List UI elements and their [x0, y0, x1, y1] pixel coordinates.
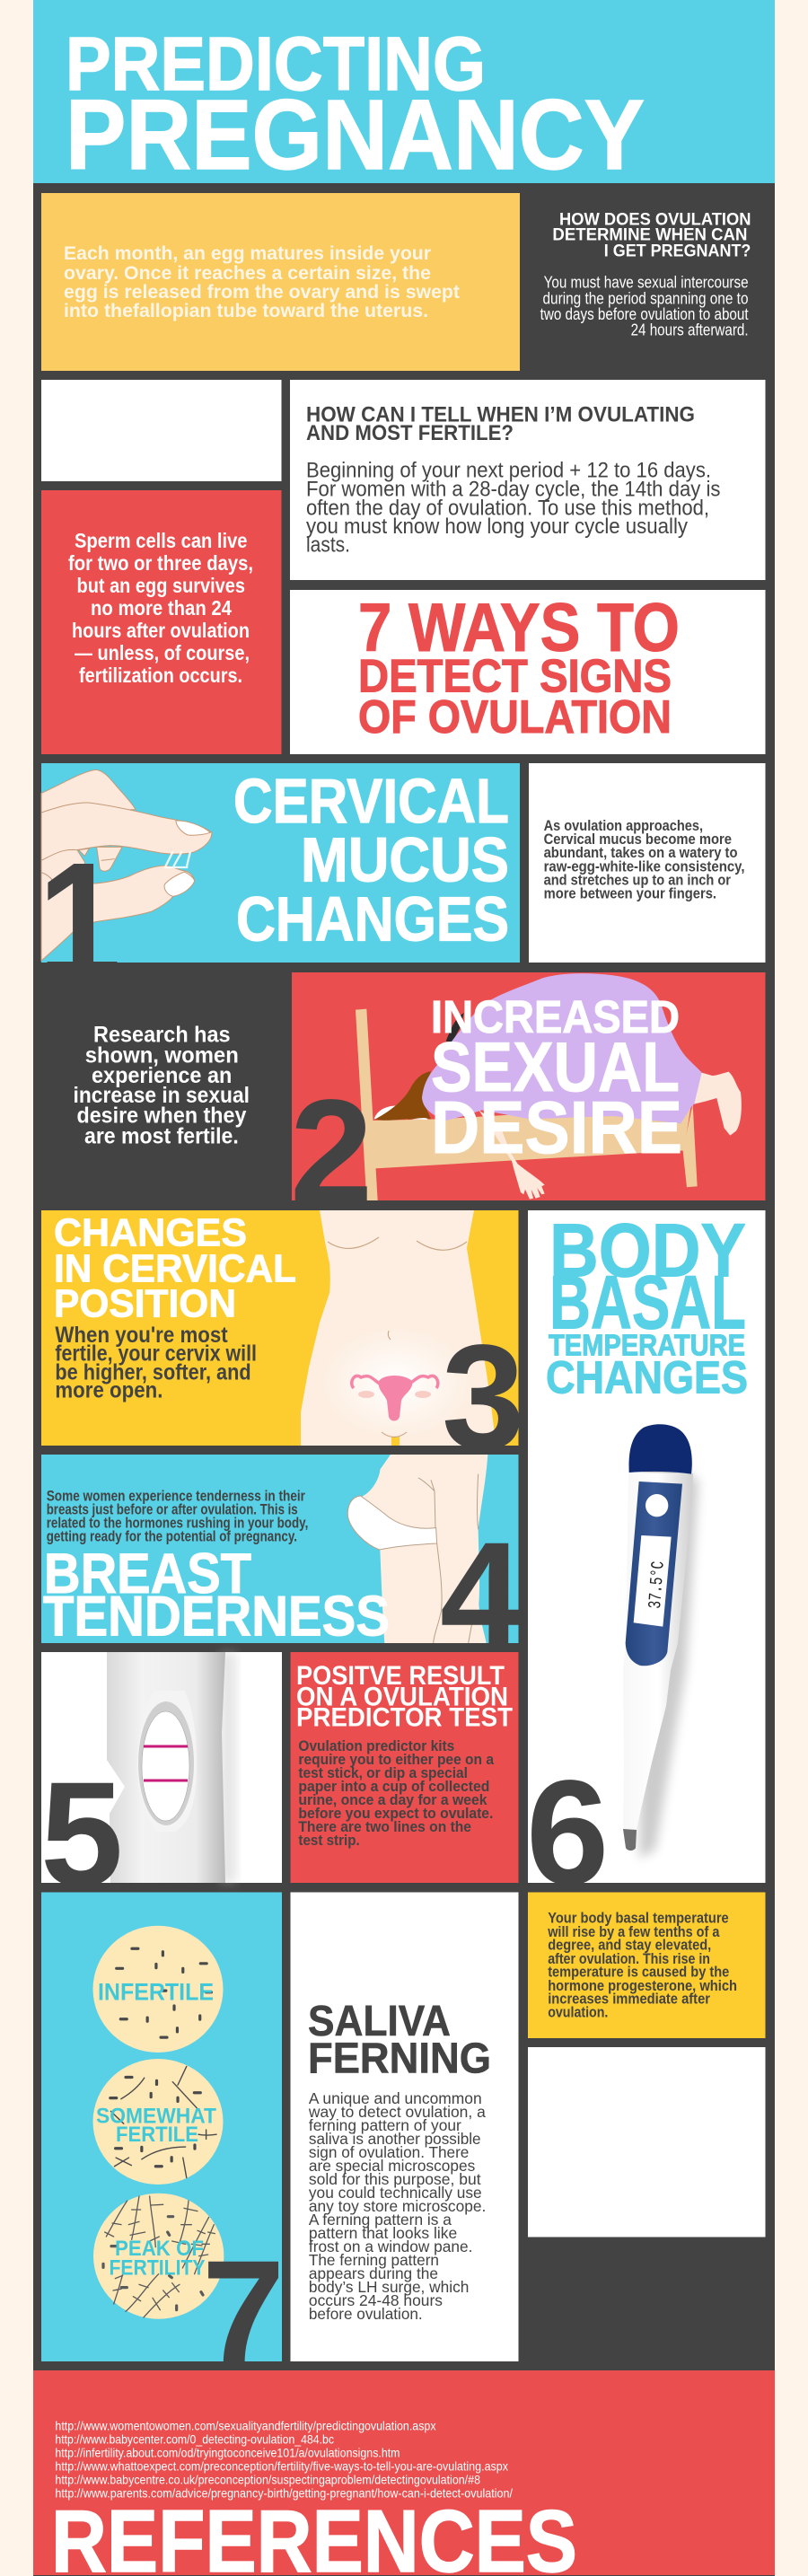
- panel: 3 cervical position: [41, 1210, 524, 1481]
- circle: peak of fertility: [93, 2194, 224, 2319]
- survival text: — unless, of course,: [75, 641, 250, 664]
- positive result text: require you to either pee on a: [298, 1751, 494, 1768]
- basal temperature body text: will rise by a few tenths of a: [547, 1923, 720, 1940]
- survival text: fertilization occurs.: [79, 664, 242, 687]
- heading: increased sexual desire: SEXUAL: [431, 1027, 680, 1106]
- positive result text: Ovulation predictor kits: [298, 1737, 454, 1754]
- panel: cervical mucus text: [529, 763, 765, 963]
- body text: [306, 459, 720, 558]
- illustration: torso with uterus: [301, 1210, 496, 1446]
- icon: test stick: [107, 1652, 236, 1883]
- saliva ferning text: saliva is another possible: [309, 2130, 481, 2148]
- egg intro text: [64, 243, 460, 321]
- positive result text: before you expect to ovulate.: [298, 1805, 493, 1822]
- circle: somewhat fertile: SOMEWHAT: [96, 2105, 216, 2128]
- positive result text: [298, 1737, 494, 1849]
- text block: research: [74, 1023, 250, 1148]
- illustration: torso with bra: [347, 1455, 487, 1643]
- heading: 7 ways to detect signs of ovulation: OF OVULATION: [358, 691, 672, 743]
- basal temperature body text: hormone progesterone, which: [548, 1977, 737, 1994]
- positive result text: There are two lines on the: [298, 1818, 471, 1835]
- panel: 2 increased sexual desire: [290, 972, 765, 1235]
- heading: increased sexual desire: [431, 991, 682, 1169]
- icon: uterus: [352, 1376, 438, 1420]
- panel: basal temperature text: [528, 1893, 765, 2038]
- panel: header: [33, 0, 775, 190]
- saliva ferning text: [308, 2089, 486, 2323]
- cervical position text: fertile, your cervix will: [55, 1341, 257, 1367]
- panel: egg intro: [41, 193, 520, 371]
- panel: positive result: [291, 1652, 519, 1883]
- cervical mucus body text: As ovulation approaches,: [544, 818, 703, 834]
- number 7: 7: [202, 2230, 285, 2396]
- heading: increased sexual desire: INCREASED: [431, 991, 680, 1042]
- panel: 5 ovulation test stick: [40, 1652, 282, 1918]
- saliva ferning text: you could technically use: [309, 2184, 482, 2202]
- number 6: 6: [526, 1750, 609, 1916]
- circle: peak of fertility: PEAK OF: [115, 2237, 204, 2261]
- body text: Beginning of your next period + 12 to 16 days.: [306, 459, 711, 483]
- icon: thermometer: [623, 1424, 698, 1859]
- text block: how does ovulation determine: You must have sexual intercourse: [544, 274, 749, 292]
- panel: sperm and egg survival: [41, 490, 282, 754]
- number 3: 3: [442, 1314, 524, 1481]
- text block: research: increase in sexual: [74, 1083, 250, 1108]
- text block: research: desire when they: [77, 1103, 246, 1129]
- saliva ferning text: sold for this purpose, but: [309, 2170, 481, 2188]
- cervical mucus body text: more between your fingers.: [544, 885, 716, 901]
- survival text: no more than 24: [91, 596, 232, 620]
- positive result text: test strip.: [298, 1832, 360, 1849]
- breast tenderness text: related to the hormones rushing in your body,: [47, 1516, 308, 1532]
- number 5: 5: [40, 1752, 123, 1918]
- panel: 6 body basal temperature: [526, 1209, 765, 1916]
- breast tenderness text: getting ready for the potential of pregnancy.: [47, 1529, 297, 1545]
- heading: saliva ferning: SALIVA: [308, 1998, 451, 2045]
- text block: how does ovulation determine: during the period spanning one to: [542, 289, 749, 307]
- heading: 7 ways to detect signs of ovulation: 7 WAYS TO: [358, 590, 680, 666]
- egg intro text: ovary. Once it reaches a certain size, the: [64, 263, 431, 284]
- breast tenderness text: [47, 1489, 308, 1545]
- saliva ferning text: frost on a window pane.: [309, 2238, 472, 2255]
- title: PREGNANCY: [66, 80, 645, 190]
- saliva ferning text: are special microscopes: [309, 2157, 476, 2175]
- illustration: couple on a bed: [356, 973, 742, 1200]
- body text: you must know how long your cycle usually: [306, 514, 688, 539]
- cervical mucus body text: [544, 818, 745, 901]
- egg intro text: Each month, an egg matures inside your: [64, 243, 431, 264]
- heading: increased sexual desire: DESIRE: [431, 1086, 682, 1169]
- text block: how does ovulation determine: [540, 210, 751, 338]
- text block: research: shown, women: [85, 1042, 239, 1068]
- cervical mucus body text: raw-egg-white-like consistency,: [544, 858, 745, 875]
- icon: mucus strands: [164, 851, 190, 868]
- circle: somewhat fertile: [93, 2059, 223, 2185]
- survival text: for two or three days,: [68, 551, 253, 575]
- positive result text: test stick, or dip a special: [298, 1764, 468, 1781]
- basal temperature body text: ovulation.: [548, 2003, 608, 2020]
- saliva ferning text: any toy store microscope.: [309, 2197, 486, 2215]
- heading: 7 ways to detect signs of ovulation: [358, 590, 680, 743]
- blank white panel: [41, 380, 282, 481]
- body text: lasts.: [306, 533, 350, 558]
- heading: saliva ferning: [308, 1998, 491, 2083]
- survival text: but an egg survives: [77, 574, 245, 597]
- heading: positive result: ON A OVULATION: [296, 1682, 508, 1711]
- saliva ferning text: body’s LH surge, which: [309, 2278, 469, 2296]
- heading: changes in cervical position: POSITION: [54, 1282, 236, 1326]
- heading: body basal temperature changes: CHANGES: [546, 1352, 748, 1403]
- icon: fingers: [41, 769, 212, 961]
- text block: how does ovulation determine: two days before ovulation to about: [540, 305, 749, 323]
- survival text: hours after ovulation: [72, 619, 250, 642]
- heading: positive result: [296, 1661, 513, 1733]
- heading: body basal temperature changes: [546, 1209, 748, 1403]
- reference links: http://infertility.about.com/od/tryingtoconceive101/a/ovulationsigns.htm: [55, 2446, 400, 2460]
- text block: research: Research has: [93, 1023, 231, 1048]
- saliva ferning text: ferning pattern of your: [309, 2116, 461, 2134]
- saliva ferning text: A ferning pattern is a: [309, 2211, 452, 2229]
- panel: references: [33, 2370, 775, 2576]
- saliva ferning text: way to detect ovulation, a: [308, 2103, 486, 2121]
- text block: research: are most fertile.: [84, 1123, 239, 1148]
- text block: how does ovulation determine: I GET PREGNANT?: [604, 241, 751, 260]
- heading: positive result: PREDICTOR TEST: [296, 1703, 513, 1733]
- cervical mucus body text: Cervical mucus become more: [544, 831, 732, 848]
- panel: how can I tell: [290, 380, 765, 580]
- panel: saliva ferning: [291, 1893, 519, 2361]
- number 1: 1: [38, 829, 121, 1015]
- reference links: http://www.babycenter.com/0_detecting-ovulation_484.bc: [55, 2432, 334, 2447]
- survival text: Sperm cells can live: [75, 529, 248, 552]
- reference links: http://www.whattoexpect.com/preconception/fertility/five-ways-to-tell-you-are-ovulating.aspx: [55, 2459, 508, 2474]
- basal temperature body text: increases immediate after: [548, 1990, 710, 2008]
- reference links: http://www.babycentre.co.uk/preconception/suspectingaproblem/detectingovulation/#8: [55, 2473, 480, 2487]
- basal temperature body text: Your body basal temperature: [548, 1909, 729, 1926]
- text block: how does ovulation determine: 24 hours afterward.: [631, 321, 749, 338]
- circle: infertile: [93, 1926, 223, 2053]
- cervical position text: more open.: [55, 1378, 162, 1403]
- heading: 7 ways to detect signs of ovulation: DETECT SIGNS: [358, 651, 672, 703]
- cervical mucus body text: and stretches up to an inch or: [544, 872, 732, 888]
- icon: thermometer: 37.5°C: [646, 1561, 670, 1609]
- heading: breast tenderness: BREAST: [44, 1543, 251, 1605]
- panel: 1 cervical mucus: [41, 763, 520, 963]
- title: [66, 22, 645, 190]
- saliva ferning text: before ovulation.: [309, 2305, 423, 2323]
- heading: cervical mucus changes: CHANGES: [236, 884, 509, 954]
- icon: fingernails: [164, 821, 210, 896]
- heading: body basal temperature changes: TEMPERATURE: [549, 1328, 745, 1361]
- text block: how does ovulation determine: DETERMINE WHEN CAN: [552, 225, 747, 245]
- breast tenderness text: breasts just before or after ovulation. This is: [47, 1502, 298, 1518]
- basal temperature body text: after ovulation. This rise in: [548, 1950, 710, 1967]
- heading: cervical mucus changes: CERVICAL: [233, 766, 509, 836]
- title: PREDICTING: [66, 22, 486, 106]
- saliva ferning text: A unique and uncommon: [309, 2089, 482, 2107]
- heading: AND MOST FERTILE?: [306, 421, 514, 445]
- heading: cervical mucus changes: MUCUS: [301, 825, 509, 895]
- heading: [306, 402, 695, 445]
- text block: research: experience an: [92, 1063, 232, 1088]
- panel: 7 ferning microscope views: [41, 1893, 285, 2396]
- cervical position text: When you're most: [55, 1323, 228, 1348]
- reference links: http://www.womentowomen.com/sexualityandfertility/predictingovulation.aspx: [55, 2419, 436, 2433]
- survival text: [68, 529, 253, 687]
- basal temperature body text: temperature is caused by the: [548, 1964, 729, 1981]
- basal temperature body text: [547, 1909, 737, 2020]
- blank white panel: [528, 2047, 765, 2238]
- body text: For women with a 28-day cycle, the 14th day is: [306, 478, 720, 502]
- body text: often the day of ovulation. To use this method,: [306, 496, 709, 520]
- heading: changes in cervical position: IN CERVICAL: [54, 1246, 296, 1290]
- circle: peak of fertility: FERTILITY: [110, 2256, 205, 2281]
- saliva ferning text: The ferning pattern: [309, 2251, 439, 2269]
- positive result text: urine, once a day for a week: [298, 1791, 487, 1808]
- text block: how does ovulation determine: HOW DOES OVULATION: [559, 210, 751, 230]
- egg intro text: into thefallopian tube toward the uterus.: [64, 301, 428, 321]
- circle: infertile: INFERTILE: [98, 1978, 214, 2005]
- heading: HOW CAN I TELL WHEN I’M OVULATING: [306, 402, 695, 426]
- egg intro text: egg is released from the ovary and is swept: [64, 282, 460, 303]
- heading: breast tenderness: [43, 1543, 390, 1648]
- reference links: [55, 2419, 513, 2501]
- heading: body basal temperature changes: BODY: [549, 1209, 746, 1293]
- icon: two result lines: [144, 1745, 188, 1781]
- saliva ferning text: appears during the: [309, 2264, 438, 2282]
- cervical position text: be higher, softer, and: [55, 1360, 251, 1385]
- panel: 4 breast tenderness: [41, 1455, 523, 1678]
- saliva ferning text: occurs 24-48 hours: [309, 2291, 443, 2309]
- cervical position text: [55, 1323, 257, 1403]
- positive result text: paper into a cup of collected: [298, 1778, 489, 1795]
- heading: body basal temperature changes: BASAL: [549, 1260, 746, 1344]
- heading: changes in cervical position: [54, 1210, 296, 1326]
- number 4: 4: [440, 1512, 523, 1678]
- panel: 7 ways: [290, 590, 765, 754]
- cervical mucus body text: abundant, takes on a watery to: [544, 845, 738, 861]
- saliva ferning text: pattern that looks like: [309, 2224, 457, 2242]
- heading: changes in cervical position: CHANGES: [54, 1210, 247, 1254]
- heading: saliva ferning: FERNING: [308, 2035, 491, 2083]
- number 2: 2: [290, 1069, 373, 1235]
- circle: somewhat fertile: FERTILE: [116, 2123, 198, 2147]
- heading: breast tenderness: TENDERNESS: [43, 1586, 390, 1648]
- heading: cervical mucus changes: [233, 766, 509, 954]
- saliva ferning text: sign of ovulation. There: [309, 2143, 469, 2161]
- heading: positive result: POSITVE RESULT: [296, 1661, 505, 1691]
- basal temperature body text: degree, and stay elevated,: [548, 1937, 711, 1954]
- breast tenderness text: Some women experience tenderness in their: [47, 1489, 305, 1505]
- reference links: http://www.parents.com/advice/pregnancy-birth/getting-pregnant/how-can-i-detect-ovulation/: [55, 2486, 513, 2501]
